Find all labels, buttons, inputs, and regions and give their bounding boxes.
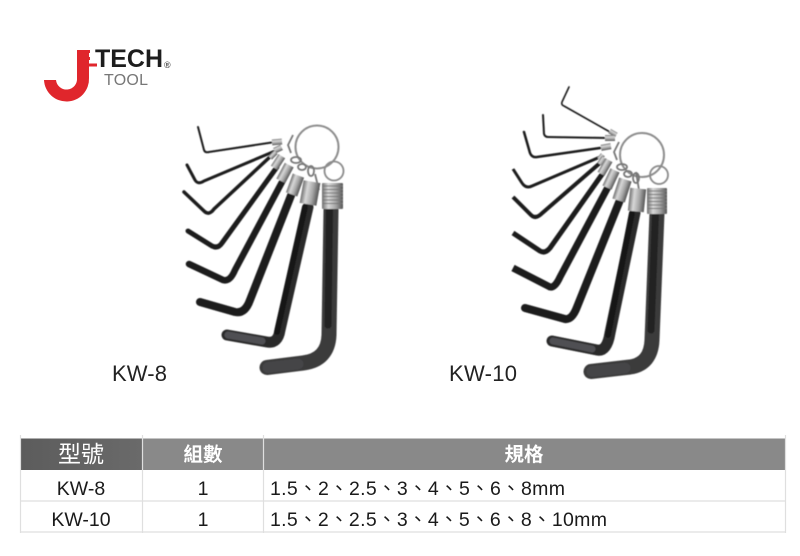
table row: KW-8: KW-8 [57, 478, 105, 500]
table row: KW-10: 1 [198, 509, 208, 531]
silver ferrules [597, 129, 667, 214]
header: model: 型號 [58, 441, 104, 467]
product photo: KW-8 hex key set [184, 126, 344, 368]
logo mark: red J [44, 50, 89, 102]
small ring [650, 166, 668, 184]
specification table [20, 435, 786, 533]
header: specification: 規格 [504, 444, 544, 466]
spring coil [647, 191, 667, 208]
chain links [614, 142, 640, 196]
table rules [20, 435, 786, 533]
key ring [296, 126, 338, 168]
hex keys, smallest to largest [184, 127, 331, 368]
small ring [324, 162, 344, 180]
table row: KW-10: 1.5、2、2.5、3、4、5、6、8、10mm [270, 509, 607, 531]
model label: KW-10: KW-10 [449, 361, 517, 386]
chain links [288, 135, 319, 190]
silver ferrules [268, 139, 343, 209]
logo wordmark: TECH: TECH [95, 46, 163, 73]
logo subline: TOOL: TOOL [104, 72, 148, 89]
table row: KW-8: 1.5、2、2.5、3、4、5、6、8mm [270, 478, 565, 500]
logo registered mark: ® [164, 60, 171, 70]
logo: JETECH TOOL [44, 46, 171, 102]
table row: KW-8 [57, 478, 565, 500]
table row: KW-8: 1 [198, 478, 208, 500]
table row: KW-10: KW-10 [51, 509, 111, 531]
model label: KW-8: KW-8 [112, 361, 167, 386]
table row: KW-10 [51, 509, 607, 531]
logo mark: red E bars [78, 50, 97, 66]
spring coil [322, 186, 343, 204]
header: sets: 組數 [183, 444, 223, 466]
hex keys, smallest to largest [513, 87, 657, 372]
product photo: KW-10 hex key set [513, 87, 668, 372]
key ring [620, 133, 664, 177]
table header row [20, 438, 786, 470]
